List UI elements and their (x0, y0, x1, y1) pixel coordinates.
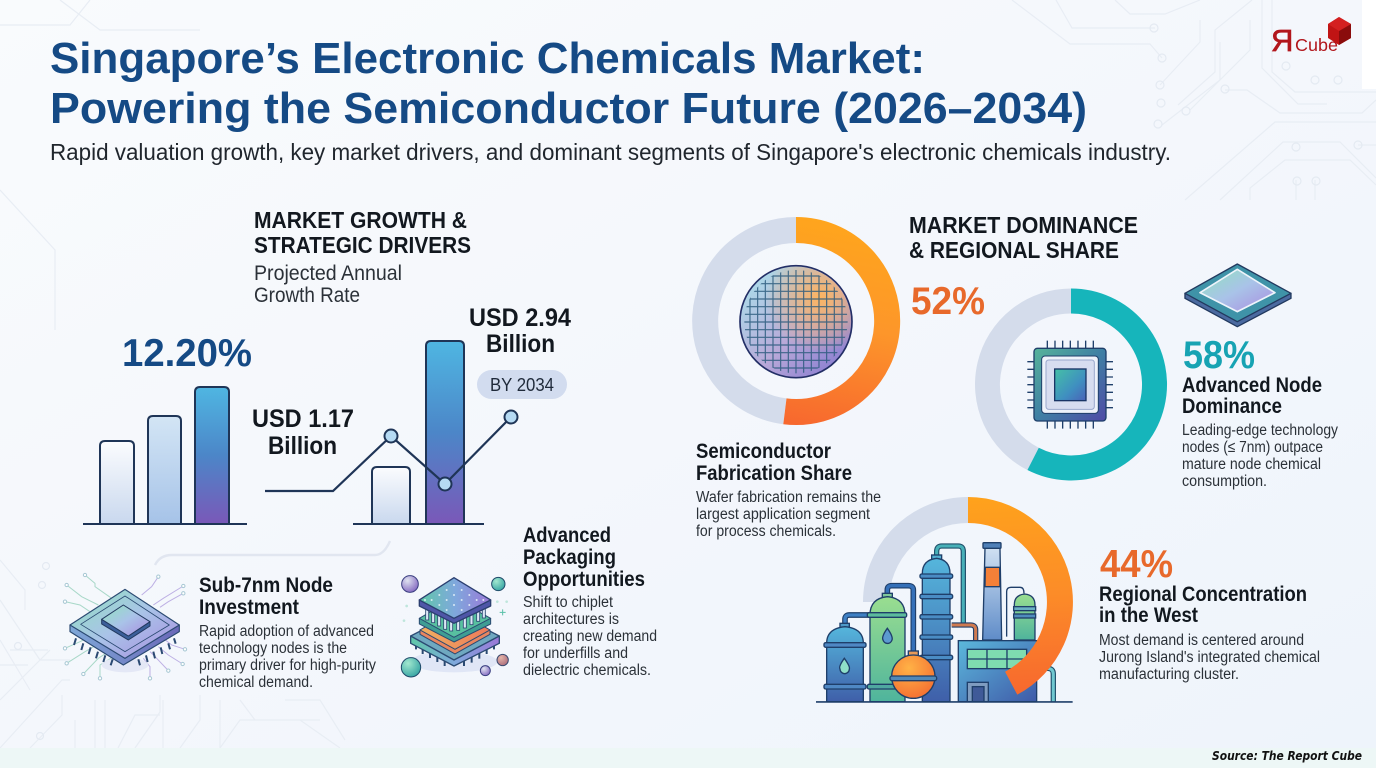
label: projected annual growth rate: Projected Annual (254, 262, 402, 285)
text: advanced node dominance: Advanced Node (1182, 374, 1322, 397)
text: sub-7nm node investment: Sub-7nm Node (199, 574, 333, 597)
stat: 52%: 52% (911, 280, 985, 323)
text: advanced packaging opportunities: architectures is (523, 611, 619, 628)
heading: market dominance and regional share: & REGIONAL SHARE (909, 237, 1119, 263)
text: advanced node dominance: mature node chemical (1182, 456, 1321, 473)
text: regional concentration in the west: Jurong Island's integrated chemical (1099, 649, 1320, 666)
icon: processor chip (1027, 341, 1113, 429)
text: semiconductor fabrication share: largest application segment (696, 506, 871, 523)
heading: market dominance and regional share (909, 212, 1138, 263)
title: Singapore’s Electronic Chemicals Market: (50, 34, 925, 83)
text: regional concentration in the west (1099, 583, 1320, 683)
subtitle: Rapid valuation growth, key market drivers, and dominant segments of Singapore's electronic chemicals industry. (50, 139, 1171, 165)
stat: 12.20%: 12.20% (122, 332, 252, 375)
text: advanced node dominance (1182, 374, 1338, 490)
text: advanced node dominance: consumption. (1182, 473, 1267, 490)
text: sub-7nm node investment: technology nodes is the (199, 640, 347, 657)
text: sub-7nm node investment: Investment (199, 596, 299, 619)
icon: floating chip (1185, 264, 1291, 327)
text: advanced node dominance: nodes (≤ 7nm) outpace (1182, 439, 1323, 456)
donut arc: 44% regional share (968, 510, 1060, 683)
icon: chemical plant (816, 543, 1073, 702)
text: sub-7nm node investment (199, 574, 376, 691)
donut chart: 52% semiconductor fabrication (705, 230, 887, 412)
text: semiconductor fabrication share: Semiconductor (696, 440, 831, 463)
label: USD 1.17 Billion: Billion (268, 432, 337, 460)
text: sub-7nm node investment: primary driver for high-purity (199, 657, 376, 674)
pill: by 2034: BY 2034 (490, 375, 554, 395)
icon: silicon wafer (740, 266, 852, 378)
bar chart: annual growth (83, 387, 247, 524)
text: advanced node dominance: Leading-edge technology (1182, 422, 1338, 439)
text: regional concentration in the west: Most demand is centered around (1099, 632, 1304, 649)
chart: market value bars and line (265, 341, 518, 524)
logo: RCube (1271, 17, 1351, 58)
pill: by 2034 (477, 370, 567, 399)
text: regional concentration in the west: manufacturing cluster. (1099, 666, 1239, 683)
title: Powering the Semiconductor Future (2026–2034) (50, 84, 1087, 133)
donut chart: 58% advanced node (988, 301, 1155, 468)
text: advanced packaging opportunities: for underfills and (523, 645, 628, 662)
text: advanced packaging opportunities: Shift to chiplet (523, 594, 614, 611)
text: semiconductor fabrication share: Fabrication Share (696, 462, 852, 485)
stat: 44%: 44% (1100, 543, 1173, 586)
text: advanced packaging opportunities: Opportunities (523, 568, 645, 591)
label: USD 2.94 Billion (469, 304, 571, 358)
text: advanced packaging opportunities: creating new demand (523, 628, 657, 645)
text: sub-7nm node investment: chemical demand. (199, 674, 313, 691)
donut arc: grey track of 44% chart (876, 510, 968, 602)
label: USD 1.17 Billion: USD 1.17 (252, 405, 354, 433)
text: advanced packaging opportunities (523, 524, 657, 679)
logo: RCube: Cube (1295, 35, 1338, 55)
stat: 58%: 58% (1183, 334, 1255, 377)
label: USD 1.17 Billion (252, 405, 354, 460)
label: USD 2.94 Billion: Billion (486, 330, 555, 358)
label: projected annual growth rate (254, 262, 402, 307)
heading: market growth and strategic drivers: STRATEGIC DRIVERS (254, 232, 471, 258)
text: regional concentration in the west: in the West (1099, 604, 1198, 627)
label: USD 2.94 Billion: USD 2.94 (469, 304, 571, 332)
heading: market dominance and regional share: MARKET DOMINANCE (909, 212, 1138, 238)
text: advanced packaging opportunities: Advanced (523, 524, 611, 547)
text: advanced packaging opportunities: Packaging (523, 546, 616, 569)
heading: market growth and strategic drivers (254, 207, 471, 258)
text: advanced node dominance: Dominance (1182, 395, 1282, 418)
heading: market growth and strategic drivers: MARKET GROWTH & (254, 207, 467, 233)
text: semiconductor fabrication share: for process chemicals. (696, 523, 836, 540)
logo: RCube: Я (1271, 23, 1293, 58)
title (50, 34, 1087, 133)
text: regional concentration in the west: Regional Concentration (1099, 583, 1307, 606)
label: projected annual growth rate: Growth Rate (254, 284, 360, 307)
icon: isometric chip (63, 573, 187, 680)
text: semiconductor fabrication share (696, 440, 881, 540)
text: semiconductor fabrication share: Wafer fabrication remains the (696, 489, 881, 506)
icon: stacked chiplet package (401, 576, 508, 677)
text: advanced packaging opportunities: dielectric chemicals. (523, 662, 651, 679)
text: sub-7nm node investment: Rapid adoption of advanced (199, 623, 374, 640)
